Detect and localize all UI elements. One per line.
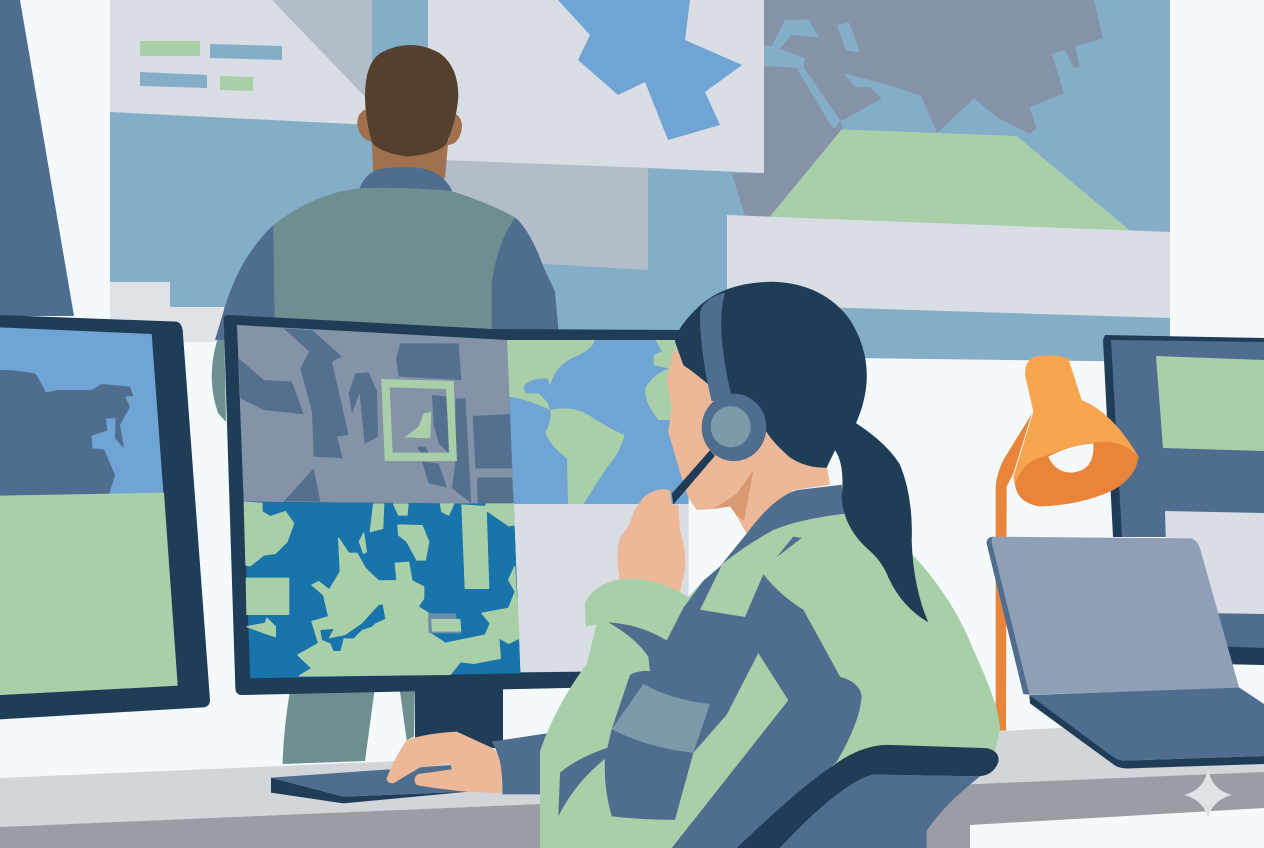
neck <box>372 140 448 178</box>
right monitor <box>1103 335 1264 665</box>
screen quadrant: world map <box>507 340 689 504</box>
bulb <box>1048 443 1093 473</box>
lamp arm <box>996 414 1032 731</box>
chair <box>737 745 999 848</box>
panel: wall map display <box>110 0 1170 362</box>
sleeve cuff <box>492 733 547 794</box>
face and neck <box>667 349 830 534</box>
lower grey panel <box>440 160 648 270</box>
sleeve pocket <box>612 684 710 753</box>
headset band <box>700 293 732 401</box>
left monitor <box>0 315 210 719</box>
collar <box>722 485 845 564</box>
keyboard <box>271 765 468 803</box>
collar <box>359 167 452 191</box>
top right map panel <box>732 0 1130 231</box>
monitor frame <box>224 315 689 695</box>
ears <box>357 109 372 142</box>
desk lamp <box>996 355 1138 731</box>
top centre map panel <box>428 0 764 173</box>
screen quadrant: terrain map <box>244 502 520 678</box>
collar slit <box>777 537 802 557</box>
top left data panel <box>110 0 372 125</box>
hair <box>365 45 458 157</box>
monitor stand <box>415 688 503 748</box>
headset ear cup <box>702 394 766 461</box>
hand <box>387 732 502 793</box>
laptop <box>987 537 1264 768</box>
cuff over wrist <box>585 579 688 628</box>
dark wall wedge at left <box>0 0 74 316</box>
screen quadrant: city map <box>237 325 514 504</box>
lower left arm <box>212 322 226 422</box>
man standing, seen from behind <box>212 45 559 764</box>
jacket <box>540 514 1000 848</box>
right sleeve <box>492 217 559 340</box>
lamp shade <box>1013 355 1138 507</box>
headset microphone <box>672 450 715 505</box>
desk <box>0 722 1264 848</box>
hand holding chin <box>617 489 685 592</box>
woman with headset <box>540 282 1000 848</box>
screen quadrant: blank grey <box>514 504 689 672</box>
left sleeve <box>215 225 275 340</box>
centre monitor <box>224 315 689 695</box>
neck shadow <box>713 470 753 521</box>
shade interior <box>1015 442 1138 506</box>
legs <box>283 687 415 764</box>
fold at lower left <box>558 747 608 816</box>
blue sleeve panel <box>605 565 862 848</box>
keyboard and hand <box>271 732 547 803</box>
target selection box <box>381 379 457 461</box>
jacket <box>273 188 515 340</box>
right light panel <box>727 215 1170 318</box>
sparkle mark <box>1184 769 1232 819</box>
hair and ponytail <box>675 282 928 622</box>
